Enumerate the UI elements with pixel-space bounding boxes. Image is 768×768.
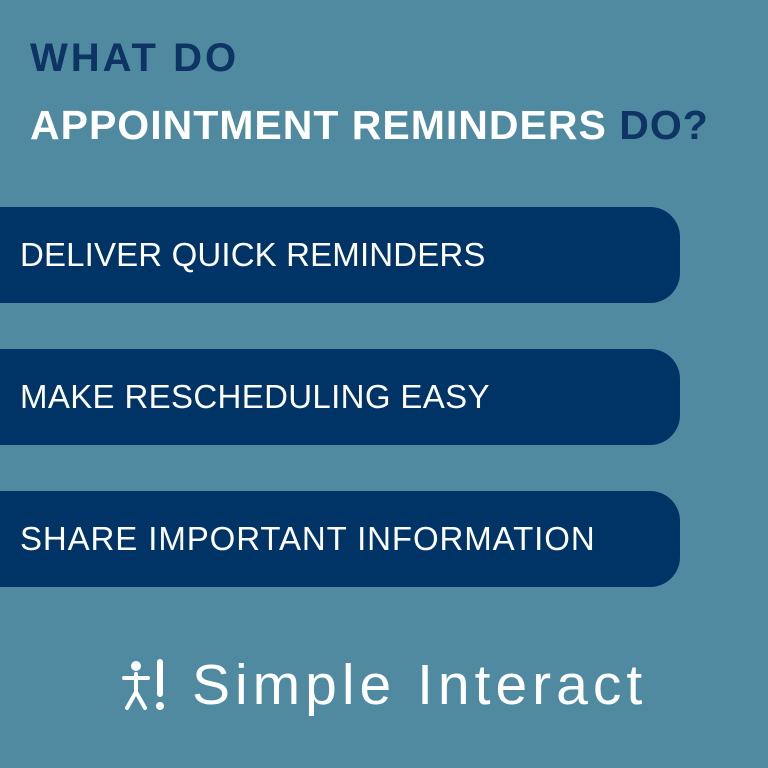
title line 1: WHAT DO	[30, 36, 239, 80]
bar: make rescheduling easy: MAKE RESCHEDULING EASY	[20, 378, 490, 415]
logo	[122, 653, 647, 717]
logo text: Simple Interact	[192, 653, 647, 717]
icon: person with exclamation	[122, 659, 164, 710]
bar: deliver quick reminders: DELIVER QUICK REMINDERS	[20, 236, 486, 273]
bar: make rescheduling easy	[0, 349, 680, 445]
bar: share important information	[0, 491, 680, 587]
title line 2: APPOINTMENT REMINDERS DO?	[30, 102, 709, 148]
bar: share important information: SHARE IMPORTANT INFORMATION	[20, 520, 596, 557]
bar: deliver quick reminders	[0, 207, 680, 303]
